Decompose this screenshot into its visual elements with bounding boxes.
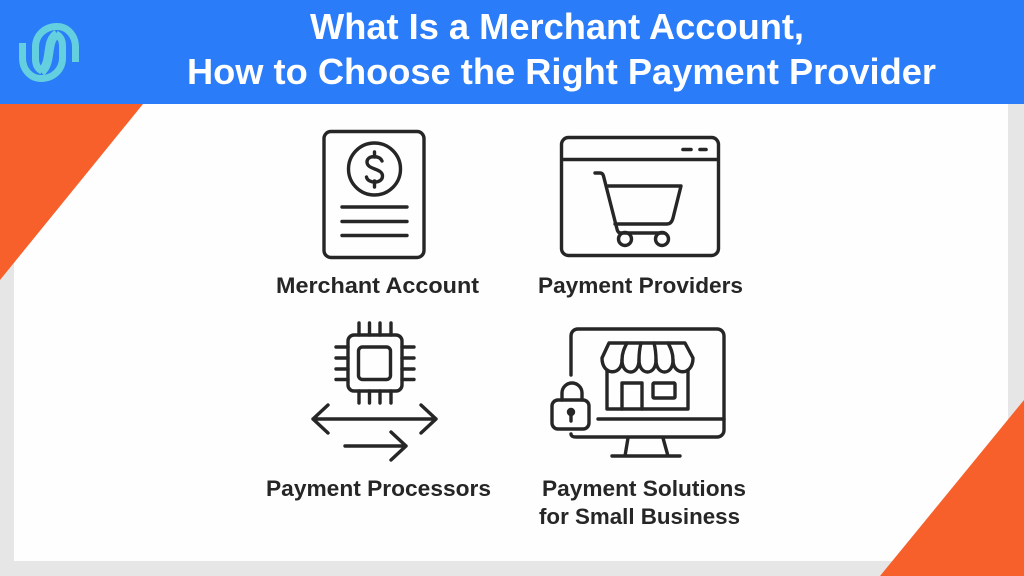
icon: browser with cart [562, 138, 718, 256]
label: Payment Providers: Payment Providers [538, 273, 743, 298]
icon: processor chip with arrows [313, 323, 436, 460]
icon: online store with lock [552, 329, 724, 456]
logo [22, 26, 76, 78]
title: What Is a Merchant Account, [310, 6, 804, 47]
header bar [0, 0, 1024, 104]
label: Payment Processors: Payment Processors [266, 476, 491, 501]
title [187, 6, 936, 92]
orange corner bottom right [880, 400, 1024, 576]
orange corner top left [0, 104, 143, 280]
label: Payment Solutions for Small Business [539, 476, 746, 529]
label: Payment Solutions for Small Business: for Small Business [539, 504, 740, 529]
label: Payment Solutions for Small Business: Payment Solutions [542, 476, 746, 501]
label: Merchant Account: Merchant Account [276, 273, 480, 298]
title: How to Choose the Right Payment Provider [187, 51, 936, 92]
icon: merchant account document [324, 132, 424, 258]
